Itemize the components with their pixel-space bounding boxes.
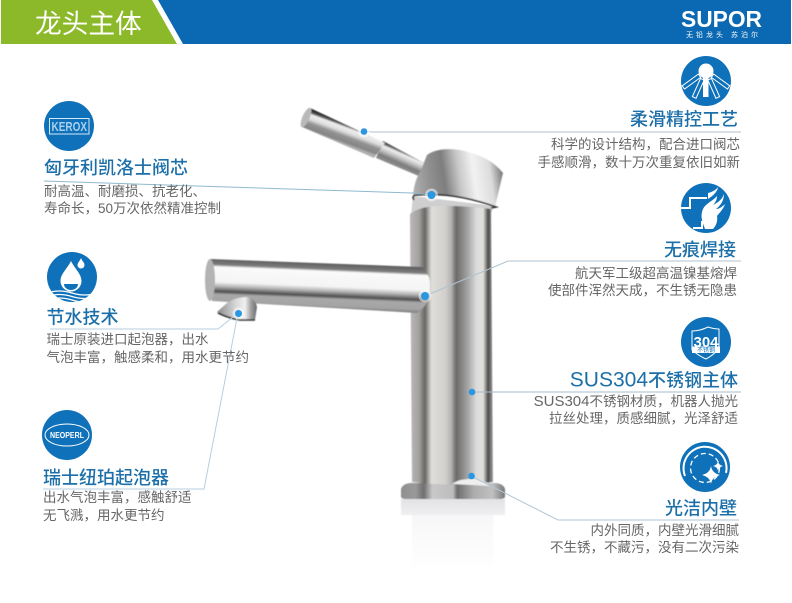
description: 科学的设计结构，配合进口阀芯 [551, 137, 740, 152]
faucet reflection [401, 499, 505, 572]
header blue bar [158, 0, 791, 44]
icon: shower [681, 56, 731, 106]
leader: inner wall [471, 476, 739, 520]
description [534, 393, 738, 426]
description: 耐高温、耐磨损、抗老化、 [44, 183, 206, 199]
neck [411, 196, 494, 216]
description: SUS304不锈钢材质，机器人抛光 [534, 393, 738, 410]
lever end [298, 106, 314, 129]
aerator [217, 297, 257, 320]
description [46, 332, 249, 365]
leader: lever [364, 131, 741, 132]
description: 无飞溅，用水更节约 [43, 508, 164, 523]
description: 手感顺滑，数十万次重复依旧如新 [538, 154, 740, 170]
marker dots [232, 126, 475, 479]
leader: welding [425, 261, 741, 296]
dot: valve [425, 188, 438, 202]
panel: smooth control [538, 56, 740, 170]
description: 使部件浑然天成，不生锈无隐患 [548, 282, 737, 298]
aerator dark rim [218, 313, 255, 320]
heading: SUS304不锈钢主体 [570, 368, 738, 392]
cap dark seam [413, 194, 496, 208]
dot: joint [418, 290, 432, 302]
leader: water saving [50, 313, 238, 329]
panel: KEROX valve [44, 101, 221, 216]
description: 不生锈，不藏污，没有二次污染 [550, 540, 739, 555]
panel: seamless welding [548, 183, 737, 298]
leader: valve core [44, 181, 432, 195]
description [43, 489, 192, 523]
dot: aerator [232, 308, 244, 320]
SUPOR logo: 无铅龙头 苏泊尔 [686, 30, 758, 39]
description: 出水气泡丰富，感触舒适 [43, 489, 192, 505]
description [550, 523, 739, 555]
icon: 304 shield: 不锈钢 [697, 346, 715, 354]
description [548, 265, 737, 298]
description [44, 183, 221, 216]
description: 寿命长，50万次依然精准控制 [44, 200, 221, 216]
handle cap [413, 149, 503, 207]
faucet base [401, 483, 505, 499]
spout end face [205, 259, 215, 301]
body base highlight [452, 479, 490, 486]
heading: 瑞士纽珀起泡器 [43, 468, 169, 488]
lever thick section [302, 108, 385, 158]
icon: KEROX [44, 101, 94, 151]
heading: 匈牙利凯洛士阀芯 [44, 158, 188, 178]
leader: SUS304 [472, 391, 741, 393]
description: 航天军工级超高温镍基熔焊 [575, 265, 737, 281]
icon: 304 shield [681, 317, 731, 367]
faucet body [410, 206, 493, 484]
header banner [1, 0, 791, 44]
description: 内外同质，内壁光滑细腻 [590, 523, 739, 538]
SUPOR logo: SUPOR [681, 6, 762, 32]
heading: 柔滑精控工艺 [630, 110, 738, 130]
header title: 龙头主体 [35, 9, 142, 39]
icon: weld flame [681, 183, 731, 233]
heading: 无痕焊接 [664, 240, 736, 260]
icon: 304 shield: 304 [693, 334, 719, 351]
header green tab [1, 0, 177, 44]
panel: clean inner wall [550, 442, 739, 555]
dot: lever [358, 126, 370, 138]
panel: SUS304 body [534, 317, 738, 426]
lever thin section [376, 141, 428, 177]
leader: neoperl [43, 313, 238, 489]
panel: water saving [46, 252, 249, 365]
spout [210, 259, 430, 313]
icon: water drop [47, 252, 97, 302]
heading: 节水技术 [46, 308, 118, 328]
connector lines [43, 131, 741, 520]
panel: NEOPERL aerator [42, 410, 192, 523]
faucet illustration [205, 106, 505, 572]
heading: 光洁内壁 [665, 498, 737, 518]
description: 气泡丰富，触感柔和，用水更节约 [46, 349, 249, 365]
icon: NEOPERL [42, 410, 92, 460]
description: 瑞士原装进口起泡器，出水 [46, 332, 209, 347]
icon: KEROX: KEROX [52, 120, 88, 134]
header white stripe [150, 0, 183, 44]
description: 拉丝处理，质感细腻，光泽舒适 [549, 410, 738, 426]
icon: NEOPERL: NEOPERL [50, 431, 84, 440]
dot: body [469, 389, 475, 395]
icon: inner wall sparkle [680, 442, 730, 492]
dot: base [468, 473, 475, 479]
description [538, 137, 740, 170]
